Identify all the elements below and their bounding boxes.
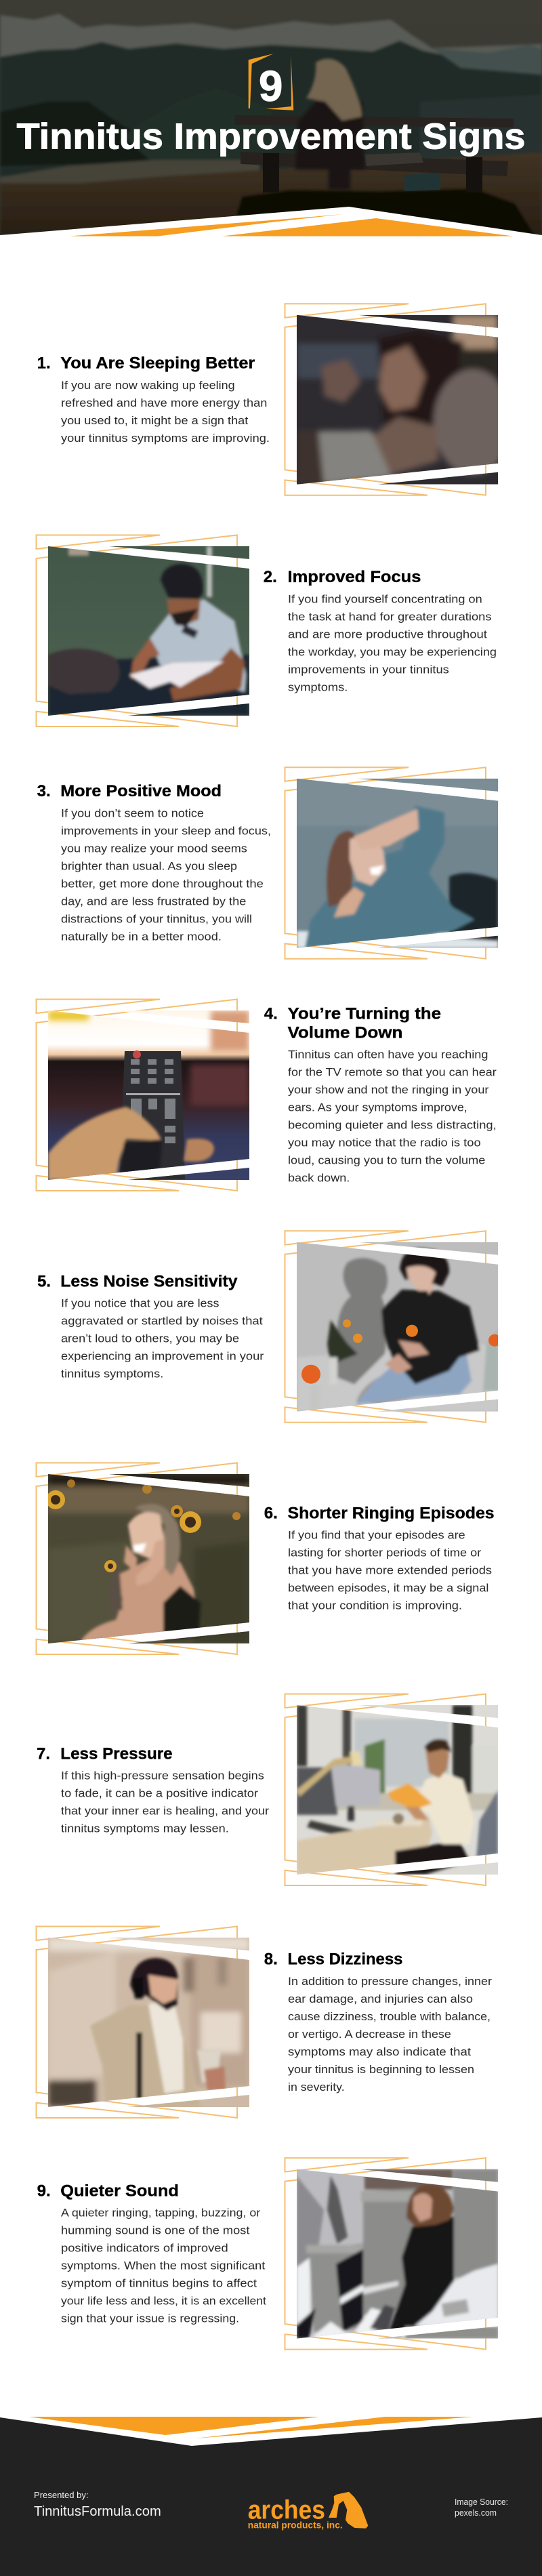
body text: tinnitus symptoms. (61, 1368, 163, 1381)
body text: day, and are less frustrated by the (61, 895, 246, 907)
photo: man reading at office desk (297, 1705, 498, 1875)
image source credit: Image Source: (455, 2497, 508, 2507)
body text: back down. (288, 1172, 350, 1185)
body text: improvements in your tinnitus (288, 664, 449, 676)
heading: You Are Sleeping Better (60, 354, 255, 373)
heading: Quieter Sound (60, 2182, 179, 2200)
body text: your tinnitus is beginning to lessen (288, 2064, 474, 2076)
photo: hand holding TV remote (48, 1010, 249, 1180)
body text (61, 807, 271, 943)
body text: loud, causing you to turn the volume (288, 1155, 485, 1167)
body text: positive indicators of improved (61, 2243, 228, 2255)
body text: becoming quieter and less distracting, (288, 1120, 497, 1132)
footer (0, 2417, 542, 2576)
heading: 6. (264, 1505, 278, 1523)
panel: sign 4 (37, 999, 497, 1191)
heading: 5. (37, 1272, 51, 1290)
photo: woman with headphones and coffee (48, 1938, 249, 2107)
orange chevron accents (28, 2417, 474, 2438)
heading: 3. (37, 782, 51, 800)
white chevron band (0, 207, 542, 271)
panel: sign 5 (37, 1231, 501, 1423)
body text: humming sound is one of the most (61, 2225, 250, 2237)
body text: sign that your issue is regressing. (61, 2313, 239, 2325)
photo: laughing woman in sunflower field (46, 1474, 249, 1643)
heading: More Positive Mood (60, 782, 222, 800)
body text (61, 1298, 264, 1381)
body text: Tinnitus can often have you reaching (288, 1049, 488, 1061)
body text: cause dizziness, trouble with balance, (288, 2011, 491, 2023)
heading: 1. (37, 354, 51, 373)
body text: that your inner ear is healing, and your (61, 1805, 270, 1818)
heading: 9. (37, 2182, 51, 2200)
panel: sign 2 (37, 535, 497, 727)
body text: In addition to pressure changes, inner (288, 1976, 493, 1988)
body text: If you notice that you are less (61, 1298, 220, 1310)
body text: If you find yourself concentrating on (288, 594, 482, 606)
body text: If you are now waking up feeling (61, 380, 235, 392)
heading (264, 1005, 441, 1042)
body text: naturally be in a better mood. (61, 931, 222, 943)
logo: arches natural products (248, 2492, 368, 2531)
body text: the workday, you may be experiencing (288, 647, 497, 659)
photo: smiling woman in teal sweater (297, 779, 498, 948)
heading: 2. (264, 568, 277, 586)
body text: you may notice that the radio is too (288, 1137, 481, 1149)
body text: you may realize your mood seems (61, 842, 247, 855)
body text: better, get more done throughout the (61, 878, 264, 890)
panel: sign 1 (37, 304, 512, 495)
heading: Less Pressure (60, 1744, 173, 1763)
body text: If you find that your episodes are (288, 1530, 465, 1542)
body text: to fade, it can be a positive indicator (61, 1788, 259, 1800)
hero photo: woman on bench facing mountains (0, 0, 542, 237)
body text: symptoms. When the most significant (61, 2260, 266, 2272)
photo frame (37, 1926, 237, 2118)
presenter credit: TinnitusFormula.com (34, 2503, 161, 2519)
panel: sign 3 (37, 767, 498, 959)
body text (61, 380, 270, 445)
panel: sign 8 (37, 1926, 493, 2118)
photo frame (37, 535, 237, 727)
body text: that your condition is improving. (288, 1600, 462, 1612)
body text: that you have more extended periods (288, 1565, 492, 1577)
photo frame (37, 1463, 237, 1654)
body text: for the TV remote so that you can hear (288, 1067, 497, 1079)
heading: Less Noise Sensitivity (60, 1272, 238, 1290)
body text (61, 2207, 266, 2325)
body text: symptom of tinnitus begins to affect (61, 2278, 257, 2290)
photo frame (37, 999, 237, 1191)
heading: 7. (37, 1744, 50, 1763)
body text (288, 1530, 492, 1612)
photo: woman with orange roses (297, 1242, 501, 1412)
body text: brighter than usual. As you sleep (61, 860, 237, 872)
body text (288, 1049, 497, 1185)
photo frame (285, 767, 486, 959)
icon: delicate arch (329, 2492, 368, 2529)
heading: Volume Down (287, 1024, 402, 1042)
panel: sign 9 (37, 2158, 498, 2350)
body text: or vertigo. A decrease in these (288, 2028, 451, 2041)
heading: 8. (264, 1950, 278, 1968)
panel: sign 7 (37, 1694, 498, 1885)
orange chevron accents (70, 214, 513, 236)
body text: If you don’t seem to notice (61, 807, 204, 819)
heading: 4. (264, 1005, 278, 1023)
photo: woman sleeping (297, 315, 512, 485)
presenter credit (34, 2490, 161, 2519)
body text: A quieter ringing, tapping, buzzing, or (61, 2207, 261, 2220)
title: Tinnitus Improvement Signs (16, 117, 526, 157)
body text: ear damage, and injuries can also (288, 1993, 473, 2005)
photo frame (285, 304, 486, 495)
body text: ears. As your symptoms improve, (288, 1102, 467, 1114)
body text: If this high-pressure sensation begins (61, 1770, 264, 1782)
body text (288, 594, 497, 694)
heading: Less Dizziness (287, 1950, 402, 1968)
body text: distractions of your tinnitus, you will (61, 913, 252, 925)
heading: Improved Focus (287, 568, 421, 586)
body text: improvements in your sleep and focus, (61, 825, 271, 837)
photo frame (285, 2158, 486, 2350)
hand (48, 1107, 214, 1180)
heading: Shorter Ringing Episodes (287, 1505, 495, 1523)
panel: sign 6 (37, 1463, 495, 1654)
header banner (0, 0, 542, 271)
image source credit: pexels.com (455, 2508, 497, 2518)
photo: woman leaning on snowy stone pillar (297, 2169, 498, 2339)
logo: arches natural products: natural products, inc. (248, 2520, 343, 2531)
body text: and are more productive throughout (288, 629, 487, 641)
body text (288, 1976, 493, 2093)
body text: aggravated or startled by noises that (61, 1315, 263, 1328)
image source credit (455, 2497, 508, 2518)
bench (235, 115, 514, 192)
photo frame (285, 1694, 486, 1885)
sunflowers (46, 1479, 241, 1572)
body text: between episodes, it may be a signal (288, 1582, 488, 1595)
seated woman (295, 59, 364, 190)
remote control (119, 1050, 185, 1179)
body text: aren’t loud to others, you may be (61, 1333, 239, 1345)
body text: your tinnitus symptoms are improving. (61, 432, 270, 445)
body text: symptoms. (288, 682, 348, 694)
body text: your life less and less, it is an excellent (61, 2295, 266, 2308)
body text: tinnitus symptoms may lessen. (61, 1823, 229, 1835)
heading: You’re Turning the (287, 1005, 441, 1023)
photo: man reading a book (48, 546, 249, 716)
big number 9: 9 (259, 62, 283, 110)
number frame (249, 54, 293, 110)
body text: your show and not the ringing in your (288, 1084, 489, 1097)
body text: in severity. (288, 2081, 345, 2093)
logo: arches natural products: arches (248, 2496, 325, 2525)
body text: experiencing an improvement in your (61, 1351, 264, 1363)
body text: refreshed and have more energy than (61, 397, 267, 409)
body text: lasting for shorter periods of time or (288, 1547, 482, 1559)
footer background (0, 2417, 542, 2576)
presenter credit: Presented by: (34, 2490, 89, 2500)
photo frame (285, 1231, 486, 1423)
body text: you used to, it might be a sign that (61, 415, 249, 427)
body text: the task at hand for greater durations (288, 611, 492, 623)
body text: symptoms may also indicate that (288, 2046, 471, 2058)
body text (61, 1770, 270, 1835)
